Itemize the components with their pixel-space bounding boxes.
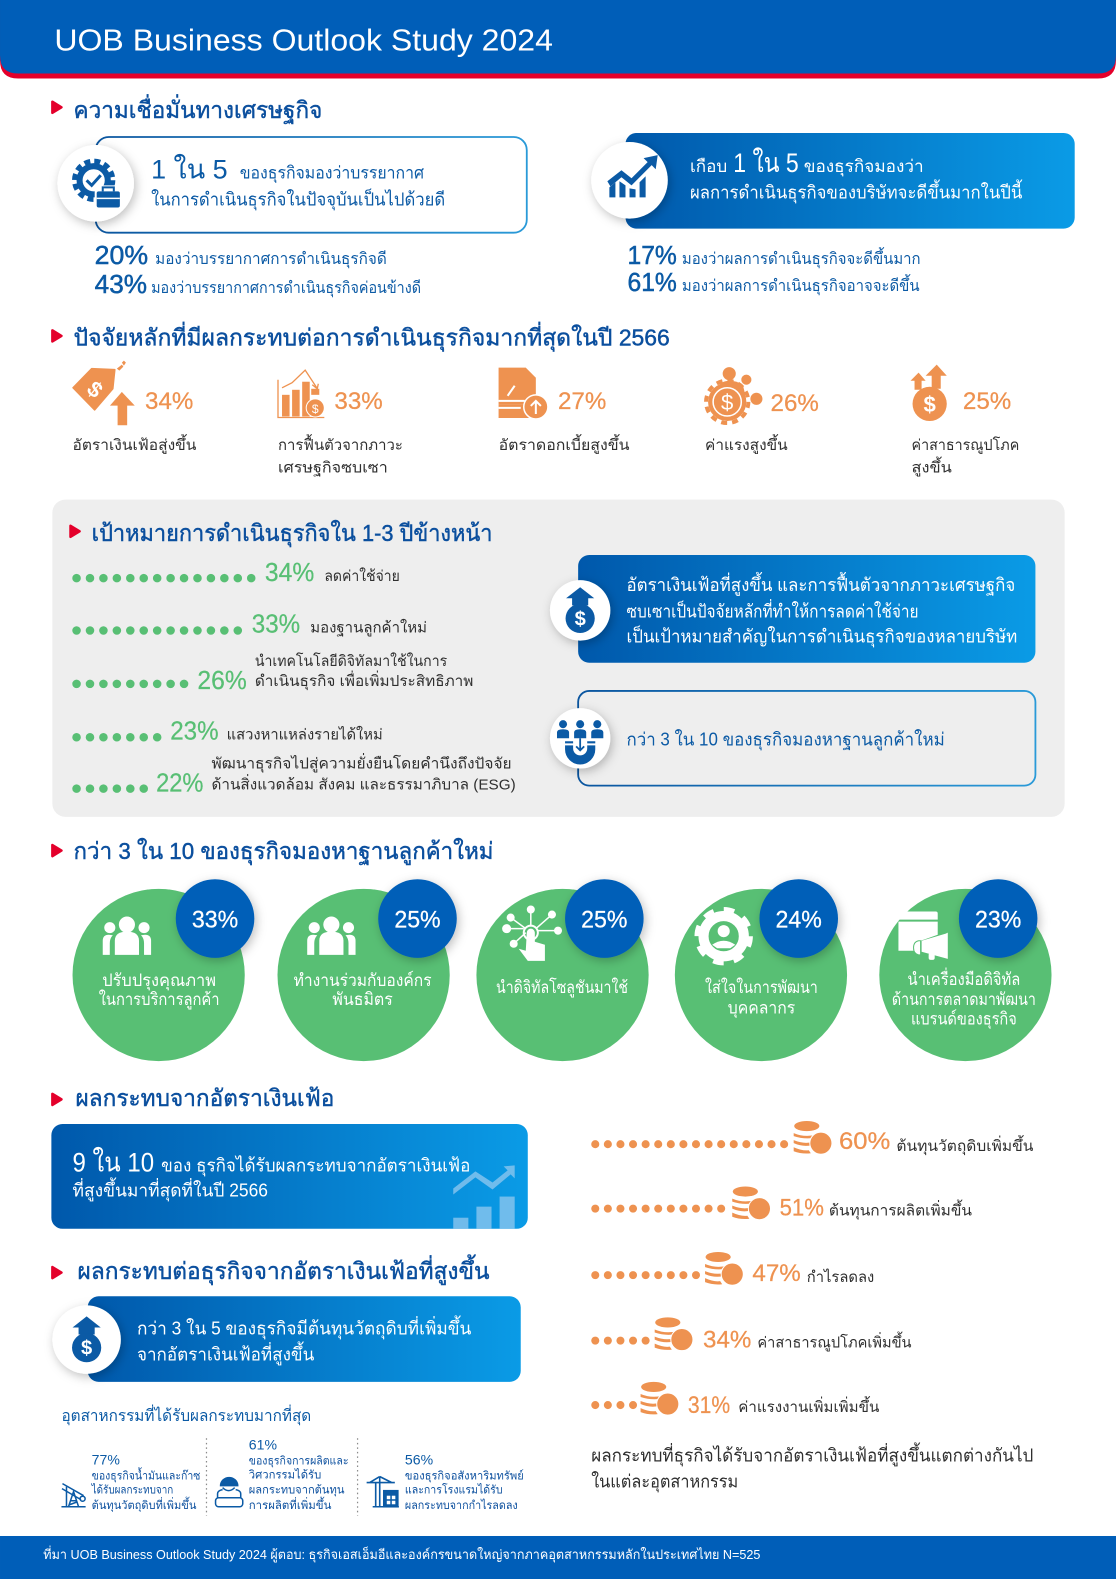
panel: 9 in 10 — [51, 1124, 528, 1229]
panel text: ของธุรกิจมองว่าบรรยากาศ — [240, 163, 424, 183]
panel text: 1 ใน 5 — [151, 153, 228, 184]
title: UOB Business Outlook Study 2024 — [54, 24, 553, 57]
factor: inflation 34%: อัตราเงินเฟ้อสู่งขึ้น — [73, 434, 196, 454]
icon: oil pump — [61, 1484, 86, 1507]
factor: slow recovery 33%: การฟื้นตัวจากภาวะ — [278, 434, 403, 454]
factor: slow recovery 33%: 33% — [334, 388, 383, 415]
panel: 3 in 5 — [52, 1296, 521, 1382]
closing note: ผลกระทบที่ธุรกิจได้รับจากอัตราเงินเฟ้อที่สูงขึ้นแตกต่างกันไป — [591, 1442, 1033, 1467]
impact row: utilities 34% — [595, 1317, 912, 1354]
factor: interest rates 27%: 27% — [558, 388, 606, 415]
industry: real estate and hotels 56% — [358, 1438, 524, 1516]
panel: nearly 1 in 5 performance — [591, 133, 1075, 229]
header banner — [0, 0, 1116, 79]
industry: oil and gas 77%: ต้นทุนวัตถุดิบที่เพิ่มขึ้น — [92, 1496, 196, 1512]
goal row: ESG 22%: ด้านสิ่งแวดล้อม สังคม และธรรมาภิบาล (ESG) — [212, 774, 516, 794]
impact row: labor 31%: ค่าแรงงานเพิ่มเพิ่มขึ้น — [738, 1396, 879, 1416]
industry: manufacturing 61% — [206, 1436, 349, 1516]
stats: business climate — [95, 240, 421, 299]
impact row: labor 31% — [595, 1382, 879, 1419]
goal row: cost reduction 34% — [77, 557, 400, 587]
factor: labor costs 26%: ค่าแรงสูงขึ้น — [705, 434, 788, 454]
icon: gear with people: $ — [721, 390, 733, 415]
subheading: most affected industries: อุตสาหกรรมที่ได้รับผลกระทบมากที่สุด — [61, 1404, 311, 1426]
goal row: new customers 33%: 33% — [252, 609, 300, 639]
circle: staff development 24%: บุคคลากร — [728, 998, 795, 1018]
panel: 1 in 5 business climate — [57, 137, 527, 233]
circle: digital marketing 23%: 23% — [975, 907, 1021, 934]
goal row: new customers 33% — [77, 609, 427, 639]
callout: inflation and cost reduction — [550, 555, 1035, 663]
industry: manufacturing 61%: การผลิตที่เพิ่มขึ้น — [249, 1496, 331, 1512]
panel text: 1 ใน 5 — [733, 147, 799, 178]
icon: bar chart with coin: $ — [312, 402, 319, 416]
factor: labor costs 26%: 26% — [771, 390, 819, 417]
circle: digital marketing 23%: นำเครื่องมือดิจิทัล — [908, 967, 1020, 989]
circle: digital marketing 23%: แบรนด์ของธุรกิจ — [911, 1009, 1017, 1029]
stats: performance: 61% — [627, 267, 677, 297]
heading: inflation impact: ผลกระทบจากอัตราเงินเฟ้อ — [76, 1085, 334, 1111]
heading: goals next 1-3 years: เป้าหมายการดำเนินธุรกิจใน 1-3 ปีข้างหน้า — [92, 520, 493, 547]
panel text — [151, 153, 445, 211]
circle: service quality 33%: ในการบริการลูกค้า — [99, 989, 220, 1010]
closing note: ในแต่ละอุตสาหกรรม — [591, 1471, 738, 1494]
callout: inflation and cost reduction: เป็นเป้าหมายสำคัญในการดำเนินธุรกิจของหลายบริษัท — [626, 625, 1017, 649]
factor: inflation 34%: 34% — [145, 388, 193, 415]
goal row: ESG 22%: 22% — [156, 768, 203, 798]
goal row: cost reduction 34%: 34% — [265, 557, 314, 587]
panel: business goals — [52, 500, 1065, 817]
icon: coins — [794, 1121, 832, 1154]
footer source bar: ที่มา UOB Business Outlook Study 2024 ผู้ตอบ: ธุรกิจเอสเอ็มอีและองค์กรขนาดใหญ่จากภาคอุตสาหกรรมหลักในประเทศไทย N=525 — [43, 1545, 760, 1563]
icon: money bag with arrows: $ — [923, 392, 936, 417]
impact row: lower profit 47%: กำไรลดลง — [807, 1268, 874, 1286]
icon: customer magnet — [557, 720, 603, 764]
circle: digital solutions 25% — [476, 879, 649, 1061]
icon: digital touch — [503, 906, 562, 961]
goal row: ESG 22%: พัฒนาธุรกิจไปสู่ความยั่งยืนโดยคำนึงถึงปัจจัย — [212, 752, 512, 773]
panel text: ในการดำเนินธุรกิจในปัจจุบันเป็นไปด้วยดี — [151, 187, 445, 211]
heading: main factors: ปัจจัยหลักที่มีผลกระทบต่อการดำเนินธุรกิจมากที่สุดในปี 2566 — [74, 321, 670, 351]
panel: 9 in 10: ที่สูงขึ้นมาที่สุดที่ในปี 2566 — [73, 1178, 268, 1203]
icon: coins — [705, 1252, 743, 1285]
stats: business climate: 43% — [95, 269, 147, 299]
goal row: digital technology 26%: 26% — [197, 665, 247, 695]
circle: service quality 33%: 33% — [192, 907, 238, 934]
impact row: raw material cost 60%: 60% — [839, 1128, 890, 1155]
factor: interest rates 27%: อัตราดอกเบี้ยสูงขึ้น — [499, 434, 630, 454]
impact row: lower profit 47%: 47% — [752, 1260, 801, 1287]
circle: digital solutions 25%: 25% — [581, 907, 627, 934]
callout: new customer base — [550, 691, 1035, 786]
icon: document with up arrow — [499, 368, 548, 419]
panel text: ของธุรกิจมองว่า — [804, 157, 924, 177]
panel: 9 in 10: ของ ธุรกิจได้รับผลกระทบจากอัตราเงินเฟ้อ — [161, 1154, 470, 1177]
goal row: new revenue 23%: 23% — [170, 715, 219, 745]
goal row: digital technology 26%: ดำเนินธุรกิจ เพื่อเพิ่มประสิทธิภาพ — [255, 670, 473, 691]
stats: business climate: มองว่าบรรยากาศการดำเนินธุรกิจค่อนข้างดี — [151, 279, 421, 298]
industry: manufacturing 61%: ผลกระทบจากต้นทุน — [249, 1484, 345, 1497]
stats: business climate: มองว่าบรรยากาศการดำเนินธุรกิจดี — [155, 250, 387, 269]
industry: manufacturing 61%: 61% — [249, 1436, 277, 1452]
factor: utilities 25%: ค่าสาธารณูปโภค — [912, 436, 1019, 454]
icon: coins — [641, 1382, 679, 1415]
icon: engineer — [216, 1478, 243, 1507]
circle: partners 25%: 25% — [394, 907, 441, 934]
stats: performance: 17% — [627, 240, 677, 270]
industry: real estate and hotels 56%: ผลกระทบจากกำไรลดลง — [405, 1498, 518, 1512]
industry: real estate and hotels 56%: และการโรงแรมได้รับ — [405, 1483, 503, 1497]
factor: utilities 25%: สูงขึ้น — [912, 456, 952, 476]
icon: browser with megaphone — [898, 912, 948, 960]
icon: coins — [732, 1186, 771, 1220]
icon: people — [307, 917, 356, 955]
panel: 3 in 5: จากอัตราเงินเฟ้อที่สูงขึ้น — [137, 1342, 314, 1366]
heading: impact on business: ผลกระทบต่อธุรกิจจากอัตราเงินเฟ้อที่สูงขึ้น — [78, 1254, 490, 1285]
industry: oil and gas 77%: 77% — [92, 1451, 120, 1467]
icon: people — [103, 917, 151, 955]
industry: real estate and hotels 56%: ของธุรกิจอสังหาริมทรัพย์ — [405, 1469, 524, 1483]
industry: oil and gas 77% — [61, 1451, 201, 1512]
icon: coins — [655, 1317, 693, 1351]
icon: price tag with up arrow: $ — [82, 376, 108, 403]
goal row: cost reduction 34%: ลดค่าใช้จ่าย — [324, 567, 400, 585]
stats: performance: มองว่าผลการดำเนินธุรกิจอาจจะดีขึ้น — [682, 274, 920, 296]
goal row: new revenue 23% — [77, 715, 383, 745]
stats: performance: มองว่าผลการดำเนินธุรกิจจะดีขึ้นมาก — [682, 247, 921, 269]
circle: partners 25% — [277, 879, 457, 1061]
circle: service quality 33% — [73, 879, 254, 1061]
impact row: raw material cost 60% — [595, 1121, 1033, 1156]
callout: new customer base: กว่า 3 ใน 10 ของธุรกิจมองหาฐานลูกค้าใหม่ — [626, 728, 945, 751]
circle: service quality 33%: ปรับปรุงคุณภาพ — [102, 971, 216, 991]
impact row: labor 31%: 31% — [688, 1392, 730, 1419]
circle: digital marketing 23%: ด้านการตลาดมาพัฒนา — [892, 990, 1036, 1009]
factor: utilities 25%: 25% — [963, 388, 1011, 415]
goal row: new customers 33%: มองฐานลูกค้าใหม่ — [310, 619, 427, 637]
goal row: digital technology 26%: นำเทคโนโลยีดิจิทัลมาใช้ในการ — [255, 652, 447, 670]
goal row: ESG 22% — [77, 752, 516, 798]
impact row: utilities 34%: ค่าสาธารณูปโภคเพิ่มขึ้น — [757, 1332, 912, 1352]
goal row: new revenue 23%: แสวงหาแหล่งรายได้ใหม่ — [227, 725, 383, 743]
industry: oil and gas 77%: ของธุรกิจน้ำมันและก๊าซ — [92, 1467, 201, 1483]
impact row: production cost 51%: ต้นทุนการผลิตเพิ่มขึ้น — [829, 1200, 972, 1221]
factor: interest rates 27% — [499, 368, 630, 454]
panel text: เกือบ — [690, 157, 727, 176]
panel text: ผลการดำเนินธุรกิจของบริษัทจะดีขึ้นมากในปีนี้ — [690, 179, 1023, 204]
footer source bar — [0, 1536, 1116, 1579]
impact row: production cost 51% — [595, 1186, 972, 1222]
icon: faded rising chart — [453, 1165, 515, 1229]
circle: partners 25%: พันธมิตร — [332, 990, 393, 1009]
icon: crane and buildings — [367, 1477, 399, 1507]
goal row: digital technology 26% — [77, 652, 473, 695]
heading: new customers: กว่า 3 ใน 10 ของธุรกิจมองหาฐานลูกค้าใหม่ — [74, 838, 494, 865]
industry: manufacturing 61%: วิศวกรรมได้รับ — [248, 1468, 321, 1482]
icon: person in gear — [697, 910, 750, 962]
circle: staff development 24%: ใส่ใจในการพัฒนา — [705, 977, 818, 997]
industry: oil and gas 77%: ได้รับผลกระทบจาก — [91, 1483, 173, 1497]
icon: rising chart — [607, 155, 658, 197]
circle: digital solutions 25%: นำดิจิทัลโซลูชันมาใช้ — [496, 977, 628, 998]
heading: economic confidence: ความเชื่อมั่นทางเศรษฐกิจ — [74, 94, 322, 124]
circle: digital marketing 23% — [879, 879, 1052, 1061]
impact row: raw material cost 60%: ต้นทุนวัตถุดิบเพิ่มขึ้น — [896, 1135, 1033, 1156]
closing note — [591, 1442, 1033, 1494]
circle: partners 25%: ทำงานร่วมกับองค์กร — [294, 971, 432, 990]
circle: staff development 24% — [675, 879, 847, 1061]
callout: inflation and cost reduction: ซบเซาเป็นปัจจัยหลักที่ทำให้การลดค่าใช้จ่าย — [626, 598, 919, 621]
impact row: production cost 51%: 51% — [780, 1195, 824, 1222]
impact row: lower profit 47% — [595, 1252, 874, 1287]
circle: staff development 24%: 24% — [776, 907, 822, 934]
icon: gear with briefcase — [75, 161, 120, 208]
panel: 3 in 5: กว่า 3 ใน 5 ของธุรกิจมีต้นทุนวัตถุดิบที่เพิ่มขึ้น — [137, 1316, 471, 1341]
factor: inflation 34% — [73, 361, 196, 454]
stats: business climate: 20% — [95, 240, 148, 270]
impact row: utilities 34%: 34% — [703, 1327, 751, 1354]
stats: performance — [627, 240, 921, 297]
industry: real estate and hotels 56%: 56% — [405, 1451, 434, 1467]
factor: labor costs 26% — [705, 367, 819, 454]
factor: slow recovery 33% — [278, 370, 403, 476]
panel: 9 in 10: 9 ใน 10 — [73, 1146, 154, 1177]
panel text — [690, 147, 1023, 204]
callout: inflation and cost reduction: อัตราเงินเฟ้อที่สูงขึ้น และการฟื้นตัวจากภาวะเศรษฐกิจ — [626, 572, 1015, 596]
factor: utilities 25% — [911, 365, 1019, 476]
industry: manufacturing 61%: ของธุรกิจการผลิตและ — [249, 1454, 349, 1467]
factor: slow recovery 33%: เศรษฐกิจซบเซา — [278, 459, 388, 476]
